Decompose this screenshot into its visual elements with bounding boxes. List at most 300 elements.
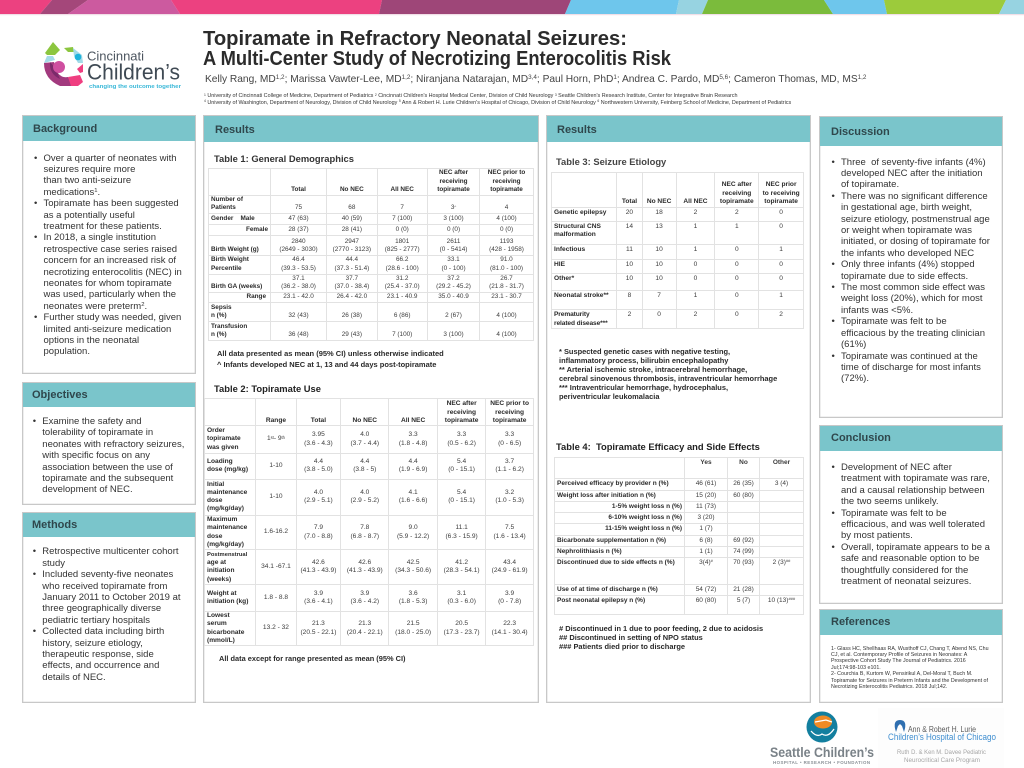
table 3: seizure etiology: 0 (694, 275, 697, 282)
table 4: efficacy and side effects (554, 457, 804, 615)
bullet list: discussion: or weight when topiramate was (841, 225, 972, 236)
table 3: seizure etiology: 10 (655, 246, 663, 253)
table 3: seizure etiology: topiramate (720, 198, 754, 205)
table 4: efficacy and side effects: 54 (72) (696, 586, 716, 593)
table 1: general demographics: 66.2 (396, 256, 408, 263)
bullet list: discussion: Topiramate was felt to be (841, 316, 947, 327)
panel: results left (203, 115, 539, 703)
table 1: general demographics: (25.4 - 37.0) (385, 283, 420, 290)
table 3: seizure etiology: Other* (554, 275, 574, 282)
heading: table 4: Table 4: Topiramate Efficacy and Side Effects (556, 440, 760, 452)
table 1: general demographics: (28.6 - 100) (386, 265, 419, 272)
panel: background (22, 115, 196, 374)
table 1: general demographics (208, 168, 534, 341)
bullet list: background: medications1. (44, 187, 100, 198)
table 1: general demographics: (0 - 100) (441, 265, 466, 272)
table 3: seizure etiology: 20 (626, 209, 633, 216)
bullet list: discussion (832, 157, 990, 384)
table 1: general demographics: Birth Weight (211, 256, 249, 263)
table 1: general demographics: 1193 (500, 238, 513, 245)
table 2: topiramate use: Range (266, 417, 286, 424)
table 2: topiramate use: (5.9 - 12.2) (397, 533, 429, 540)
table 2: topiramate use: initiation (kg) (207, 598, 248, 605)
title (203, 27, 672, 70)
table 3: seizure etiology: to receiving (763, 190, 800, 197)
table 2: topiramate use: 42.6 (358, 559, 371, 566)
table 1: general demographics: 7 (400, 204, 404, 211)
bullet list: discussion: Three of seventy-five infants (4%) (841, 157, 986, 168)
table 2: topiramate use: (3.7 - 4.4) (350, 440, 379, 447)
table 1: general demographics: 23.1 - 42.0 (283, 293, 314, 300)
logo: Cincinnati Children's: changing the outcome together (89, 84, 182, 90)
bullet list: conclusion: Development of NEC after (841, 462, 952, 473)
table 2: topiramate use: (41.3 - 43.9) (300, 567, 336, 574)
table 1: general demographics: NEC prior to (488, 169, 525, 176)
bullet list: discussion: of topiramate. (841, 179, 899, 190)
table 1: general demographics: 26 (38) (342, 312, 362, 319)
table 3: seizure etiology: 14 (626, 223, 633, 230)
table 2: topiramate use: 42.6 (312, 559, 325, 566)
table 2: topiramate use: (1.6 - 13.4) (493, 533, 526, 540)
bullet list: discussion: the infants who developed NEC (841, 248, 974, 259)
table 2: topiramate use: (3.8 - 5) (353, 466, 376, 473)
bullet list: methods (33, 546, 180, 683)
bullet list: background: neonates for whom topiramate (44, 278, 172, 289)
table 1: general demographics: 2 (67) (445, 312, 462, 319)
table 4 notes: # Discontinued in 1 due to poor feeding, 2 due to acidosis (559, 624, 763, 632)
table 3: seizure etiology: 0 (735, 292, 739, 299)
bullet list: conclusion: the two seems unlikely. (841, 496, 939, 507)
table 4: efficacy and side effects: 6 (8) (699, 537, 713, 544)
logo: Seattle Children's: HOSPITAL • RESEARCH • FOUNDATION (773, 760, 870, 765)
table 2: topiramate use: Loading (207, 458, 233, 465)
table 2: topiramate use: NEC after (447, 400, 477, 407)
table 3: seizure etiology: 2 (628, 311, 631, 318)
heading: conclusion: Conclusion (831, 432, 891, 444)
bullet list: methods: Collected data including birth (42, 626, 164, 637)
reference list: Jul;174:98-103 e101. (831, 665, 881, 671)
table 2: topiramate use: 3.1 (457, 590, 466, 597)
table 2: topiramate use: was given (207, 444, 239, 451)
table 2: topiramate use: (3.6 - 4.1) (304, 598, 333, 605)
table 1: general demographics: 46.4 (292, 256, 305, 263)
table 3: seizure etiology: 10 (626, 275, 633, 282)
bullet list: background: In 2018, a single institution (44, 232, 156, 243)
table 1: general demographics: n (%) (211, 312, 227, 319)
table 1: general demographics: 75 (295, 204, 302, 211)
table 2: topiramate use: No NEC (352, 417, 377, 424)
bullet list: background: necrotizing enterocolitis (NEC) in (44, 267, 182, 278)
bullet list: background: options in the neonatal (44, 335, 139, 346)
bullet list: background: as a potentially useful (44, 210, 135, 221)
table 4: efficacy and side effects: Discontinued due to side effects n (%) (557, 559, 675, 566)
bullet list: methods: effects, and occurrence and (42, 660, 159, 671)
bullet list: conclusion: efficacious, and was well tolerated (841, 519, 985, 530)
table 2: topiramate use: dose (207, 533, 222, 540)
heading: results: Results (557, 124, 597, 136)
bullet list: conclusion (832, 462, 990, 587)
table 2 note: All data except for range presented as mean (95% CI) (219, 654, 405, 662)
table 2: topiramate use: bicarbonate (207, 628, 244, 636)
table 1: general demographics: 4 (100) (496, 331, 517, 338)
table 2: topiramate use: Maximum (207, 516, 237, 523)
reference list: Topiramate for Seizures in Preterm Infants and the Development of (831, 678, 988, 684)
table 1: general demographics: topiramate (490, 186, 523, 193)
table 2: topiramate use: 7.5 (505, 524, 514, 531)
table 4: efficacy and side effects: 2 (3)## (773, 558, 790, 566)
table 1: general demographics: n (%) (211, 331, 227, 338)
table 4: efficacy and side effects: 69 (92) (733, 537, 754, 544)
bullet list: discussion: initiated, or dosing of topiramate for (841, 236, 990, 247)
table 1: general demographics: Transfusion (211, 323, 247, 330)
table 1: general demographics: (21.8 - 31.7) (489, 283, 524, 290)
table 2: topiramate use: 3.9 (505, 590, 514, 597)
bullet list: objectives: with specific focus on any (42, 450, 150, 461)
table 3: seizure etiology (551, 172, 804, 329)
table 3: seizure etiology: Infectious (554, 246, 585, 253)
table 2: topiramate use: NEC prior to (490, 400, 529, 407)
table 2: topiramate use: 4.1 (409, 489, 418, 496)
bullet list: objectives: neonates with refractory seizures, (42, 439, 184, 450)
table 1: general demographics: receiving (492, 178, 521, 185)
table 2: topiramate use: (20.5 - 22.1) (300, 628, 336, 636)
bullet list: background: treatment for these patients. (44, 221, 162, 232)
table 1: general demographics: Range (246, 293, 266, 300)
bullet list: background: limited anti-seizure medication (44, 324, 171, 335)
table 2: topiramate use: Lowest (207, 612, 230, 619)
table 2: topiramate use: 3.7 (505, 458, 514, 465)
table 1 notes: ^ Infants developed NEC at 1, 13 and 44 days post-topiramate (217, 360, 436, 369)
table 3: seizure etiology: 0 (694, 261, 697, 268)
table 1: general demographics: 37.7 (346, 275, 358, 282)
table 2: topiramate use: 3.2 (505, 489, 514, 496)
table 3: seizure etiology: 0 (657, 311, 661, 318)
table 2: topiramate use: 3.3 (505, 431, 514, 438)
table 1: general demographics: All NEC (390, 186, 414, 193)
table 3: seizure etiology: 1 (694, 223, 697, 230)
table 3: seizure etiology: receiving (722, 190, 751, 197)
bullet list: background: was used, particularly when the (44, 289, 176, 300)
table 3: seizure etiology: 10 (655, 261, 663, 268)
heading: references: References (831, 616, 890, 628)
heading: methods: Methods (32, 519, 77, 531)
table 1: general demographics: 4 (505, 204, 508, 211)
table 1: general demographics: 23.1 - 40.9 (387, 293, 417, 300)
table 4: efficacy and side effects: 3 (4) (775, 480, 788, 487)
table 2: topiramate use: (7.0 - 8.8) (304, 533, 333, 540)
table 3: seizure etiology: 7 (657, 292, 661, 299)
table 2: topiramate use: (2.9 - 5.2) (350, 497, 379, 504)
table 4: efficacy and side effects: 5 (7) (737, 597, 750, 604)
table 1: general demographics: 28 (41) (342, 226, 362, 233)
table 2: topiramate use: Weight at (207, 590, 237, 597)
table 2: topiramate use: 22.3 (503, 620, 516, 627)
table 2: topiramate use: 5.4 (457, 458, 466, 465)
bullet list: methods: history, seizure etiology, (42, 638, 143, 649)
table 1: general demographics: (2770 - 3123) (333, 246, 371, 253)
table 2: topiramate use: Initial (207, 481, 224, 488)
affiliations (204, 93, 791, 106)
table 1: general demographics: (2649 - 3030) (279, 246, 318, 253)
bullet list: objectives: Examine the safety and (42, 416, 142, 427)
table 1: general demographics: 26.7 (500, 275, 513, 282)
table 1: general demographics: 91.0 (500, 256, 513, 263)
table 1: general demographics: Sepsis (211, 304, 232, 311)
table 2: topiramate use: 4.0 (360, 489, 369, 496)
table 1: general demographics: 37.2 (447, 275, 460, 282)
table 1: general demographics: 3^ (451, 204, 456, 211)
table 2: topiramate use: 3.3 (457, 431, 466, 438)
table 4: efficacy and side effects: 3 (20) (698, 514, 714, 521)
table 1: general demographics: Female (246, 226, 268, 233)
table 1 notes (217, 348, 444, 369)
bullet list: background: Topiramate has been suggested (44, 198, 179, 209)
table 3: seizure etiology: Genetic epilepsy (554, 209, 606, 216)
table 2: topiramate use: 41.2 (455, 559, 468, 566)
table 1: general demographics: 31.2 (396, 275, 408, 282)
logo: Lurie Children's (888, 720, 996, 764)
table 2: topiramate use: receiving (495, 409, 524, 416)
table 3: seizure etiology: topiramate (764, 198, 798, 205)
table 2: topiramate use: Total (311, 417, 326, 424)
table 4: efficacy and side effects: 1 (1) (699, 548, 713, 555)
table 3: seizure etiology: 2 (694, 311, 697, 318)
table 2: topiramate use: 3.6 (409, 590, 418, 597)
table 2: topiramate use: 4.4 (409, 458, 418, 465)
table 3: seizure etiology: 0 (735, 246, 739, 253)
table 2: topiramate use: 7.8 (360, 524, 369, 531)
table 1: general demographics: 0 (0) (396, 226, 409, 233)
heading: table 1: Table 1: General Demographics (214, 152, 354, 164)
table 3: seizure etiology: HIE (554, 261, 565, 268)
reference list: 2- Courchia B, Kurtom W, Pensirikul A, Del-Moral T, Buch M. (831, 671, 972, 677)
bullet list: background: retrospective case series raised (44, 244, 177, 255)
table 2: topiramate use: (1.1 - 6.2) (495, 466, 524, 473)
table 4: efficacy and side effects: Use of at time of discharge n (%) (557, 586, 658, 593)
table 1: general demographics: topiramate (437, 186, 470, 193)
table 2: topiramate use: (28.3 - 54.1) (444, 567, 480, 574)
bullet list: discussion: in gestational age, birth weight, (841, 202, 972, 213)
table 1: general demographics: 2947 (345, 238, 359, 245)
table 2: topiramate use: (41.3 - 43.9) (347, 567, 383, 574)
reference list: Necrotizing Enterocolitis Pediatrics. 2018 Jul;142. (831, 684, 947, 690)
logo: Lurie Children's: Ann & Robert H. Lurie (908, 725, 976, 734)
panel: discussion (819, 116, 1003, 418)
table 1: general demographics: 2840 (291, 238, 306, 245)
table 1: general demographics: 36 (48) (288, 331, 309, 338)
table 3 notes (559, 346, 777, 400)
table 1: general demographics: 68 (348, 204, 355, 211)
table 2: topiramate use: All NEC (401, 417, 425, 424)
table 3: seizure etiology: No NEC (647, 198, 671, 205)
table 4: efficacy and side effects: 21 (28) (733, 586, 754, 593)
table 3: seizure etiology: 1 (694, 292, 697, 299)
table 1: general demographics: 44.4 (346, 256, 358, 263)
table 3: seizure etiology: malformation (554, 231, 596, 238)
table 3: seizure etiology: 8 (628, 292, 631, 299)
table 2: topiramate use: (34.3 - 50.6) (395, 567, 431, 574)
table 2: topiramate use: receiving (447, 409, 476, 416)
bullet list: discussion: The most common side effect was (841, 282, 985, 293)
table 4: efficacy and side effects: No (739, 459, 748, 466)
bullet list: discussion: infants was <5%. (841, 305, 913, 316)
table 2: topiramate use: 43.4 (503, 559, 516, 566)
bullet list: discussion: Topiramate was continued at the (841, 350, 978, 362)
table 1 notes: All data presented as mean (95% CI) unless otherwise indicated (217, 348, 444, 358)
table 4: efficacy and side effects: Nephrolithiasis n (%) (557, 548, 622, 555)
table 4: efficacy and side effects: 10 (13)### (768, 596, 795, 604)
bullet list: methods: pediatric tertiary hospitals (42, 615, 150, 626)
table 2: topiramate use: 4.0 (360, 431, 369, 438)
table 2: topiramate use: 21.3 (312, 620, 325, 627)
table 3: seizure etiology: 0 (735, 261, 739, 268)
bullet list: objectives: development of NEC. (42, 484, 133, 495)
table 3: seizure etiology: 0 (735, 311, 739, 318)
table 2: topiramate use: 9.0 (409, 524, 418, 531)
bullet list: methods: who received topiramate from (42, 581, 167, 592)
table 2: topiramate use: (1.8 - 5.3) (399, 598, 427, 605)
table 4: efficacy and side effects: Post neonatal epilepsy n (%) (557, 597, 645, 604)
table 1: general demographics: Patients (211, 204, 236, 211)
table 4: efficacy and side effects: Other (773, 459, 790, 466)
table 3: seizure etiology: 0 (735, 275, 739, 282)
bullet list: discussion: topiramate due to side effects. (841, 271, 968, 282)
table 3 notes: periventricular leukomalacia (559, 392, 659, 400)
table 4 notes: ### Patients died prior to discharge (559, 642, 685, 650)
table 1: general demographics: 0 (0) (500, 226, 513, 233)
table 3: seizure etiology: 13 (655, 223, 663, 230)
logo: Lurie Children's: Neurocritical Care Program (904, 758, 980, 764)
table 2: topiramate use: 5.4 (457, 489, 466, 496)
table 1: general demographics: 3 (100) (443, 215, 464, 222)
table 1: general demographics: No NEC (340, 186, 364, 193)
table 1: general demographics: Gender Male (211, 215, 255, 222)
table 3: seizure etiology: 11 (626, 246, 633, 253)
bullet list: discussion: seizure etiology, postmenstrual age (841, 214, 990, 225)
table 3: seizure etiology: Total (622, 198, 637, 205)
table 4 notes: ## Discontinued in setting of NPO status (559, 632, 703, 642)
logo: Cincinnati Children's: Cincinnati (87, 50, 144, 64)
table 2: topiramate use: 34.1 -67.1 (261, 563, 291, 570)
table 2: topiramate use: topiramate (445, 417, 478, 424)
bullet list: methods: therapeutic response, side (42, 649, 154, 660)
reference list: Prospective Cohort Study The Journal of Pediatrics. 2016 (831, 658, 966, 664)
table 2: topiramate use: (0 - 7.8) (498, 598, 521, 605)
table 2: topiramate use: 7.9 (314, 524, 323, 531)
title: Topiramate in Refractory Neonatal Seizures: (203, 27, 627, 50)
table 2: topiramate use: (0.5 - 6.2) (447, 440, 476, 447)
table 1: general demographics: Birth Weight (g) (211, 246, 259, 253)
table 3: seizure etiology: 10 (655, 275, 663, 282)
table 2: topiramate use: (1.0 - 5.3) (495, 497, 524, 504)
bullet list: background: Further study was needed, given (44, 312, 181, 323)
table 1: general demographics: (81.0 - 100) (490, 265, 523, 272)
table 2: topiramate use: (mg/kg/day) (207, 541, 244, 548)
bullet list: background: Over a quarter of neonates with (44, 152, 177, 164)
table 1: general demographics: Percentile (211, 265, 242, 272)
bullet list: conclusion: treatment of neonatal seizures. (841, 576, 971, 587)
table 4: efficacy and side effects: 11 (73) (696, 503, 716, 510)
heading: objectives: Objectives (32, 389, 88, 401)
table 3: seizure etiology: All NEC (683, 198, 708, 205)
table 1: general demographics: 2611 (447, 238, 460, 245)
bullet list: background: concern for an increased risk of (44, 255, 176, 266)
bullet list: objectives: association between the use of (42, 462, 173, 473)
bullet list: methods: Included seventy-five neonates (42, 569, 173, 580)
table 2: topiramate use: 3.9 (360, 590, 369, 597)
table 2: topiramate use: Postmenstrual (207, 552, 247, 558)
table 3: seizure etiology: related disease*** (554, 320, 608, 327)
table 3: seizure etiology: Neonatal stroke** (554, 292, 609, 299)
bullet list: methods: January 2011 to October 2019 at (42, 592, 180, 603)
bullet list: background: seizures require more (44, 164, 135, 175)
table 2: topiramate use: 4.4 (360, 458, 369, 465)
table 2: topiramate use (204, 398, 534, 646)
table 2: topiramate use: age at (207, 559, 226, 566)
table 2: topiramate use: serum (207, 620, 227, 627)
table 2: topiramate use: initiation (207, 567, 234, 574)
table 2: topiramate use: 20.5 (455, 620, 468, 627)
table 2: topiramate use: Order (207, 427, 225, 434)
table 2: topiramate use: topiramate (493, 417, 526, 424)
authors: Kelly Rang, MD1,2; Marissa Vawter-Lee, MD1,2; Niranjana Natarajan, MD3,4; Paul Horn, PhD1; Andrea C. Pardo, MD5,6; Cameron Thomas, MD, MS1,2 (205, 74, 866, 85)
table 2: topiramate use: dose (mg/kg) (207, 466, 248, 473)
table 3: seizure etiology: Structural CNS (554, 223, 601, 230)
bullet list: background: population. (44, 346, 90, 357)
affiliations: 4 University of Washington, Department of Neurology, Division of Child Neurology 5 Ann & Robert H. Lurie Children's Hospital of Chicago, Division of Child Neurology 6 Northwestern University, Feinberg School of Medicine, Department of Pediatrics (204, 99, 791, 106)
table 2: topiramate use: dose (207, 497, 222, 504)
table 3: seizure etiology: 0 (779, 209, 783, 216)
table 1: general demographics: Total (291, 186, 306, 193)
bullet list: methods: Retrospective multicenter cohort (42, 546, 179, 557)
table 4: efficacy and side effects: 11-15% weight loss n (%) (605, 525, 682, 532)
table 1: general demographics: 6 (86) (394, 312, 411, 319)
reference list (831, 646, 989, 690)
heading: background: Background (33, 123, 97, 135)
table 2: topiramate use: (24.9 - 61.9) (492, 567, 528, 574)
logo: Seattle Children's (770, 712, 874, 765)
table 2: topiramate use: (1.6 - 6.6) (399, 497, 427, 504)
table 2: topiramate use: 3.9 (314, 590, 323, 597)
table 1: general demographics: 0 (0) (447, 226, 460, 233)
table 3: seizure etiology: 1 (694, 246, 697, 253)
table 3: seizure etiology: 1 (779, 292, 783, 299)
table 2: topiramate use: 11.1 (455, 524, 468, 531)
table 3 notes: ** Arterial ischemic stroke, intracerebral hemorrhage, (559, 364, 747, 374)
bullet list: discussion: developed NEC after the initiation (841, 168, 983, 179)
table 1: general demographics: 37.1 (292, 275, 305, 282)
table 1: general demographics: (36.2 - 38.0) (281, 283, 316, 290)
table 2: topiramate use: (0 - 15.1) (448, 497, 475, 504)
table 1: general demographics: (39.3 - 53.5) (281, 265, 316, 272)
table 2: topiramate use: (3.6 - 4.3) (304, 440, 333, 447)
table 1: general demographics: 7 (100) (392, 331, 412, 338)
table 3: seizure etiology: 2 (694, 209, 697, 216)
table 1: general demographics: 35.0 - 40.9 (438, 293, 469, 300)
table 3 notes: cerebral sinovenous thrombosis, intraventricular hemorrhage (559, 374, 777, 382)
table 1: general demographics: 1801 (395, 238, 409, 245)
heading: results: Results (215, 124, 255, 136)
table 3: seizure etiology: 2 (779, 311, 783, 318)
table 1: general demographics: 33.1 (447, 256, 460, 263)
reference list: CJ, et al. Contemporary Profile of Seizures in Neonates: A (831, 652, 967, 658)
panel: methods (22, 512, 196, 703)
table 2: topiramate use: 1.8 - 8.8 (264, 594, 288, 601)
table 4: efficacy and side effects: 1 (7) (699, 525, 713, 532)
table 1: general demographics: (29.2 - 45.2) (436, 283, 471, 290)
table 1: general demographics: receiving (440, 178, 468, 185)
bullet list: background: neonates were preterm2. (44, 301, 147, 312)
